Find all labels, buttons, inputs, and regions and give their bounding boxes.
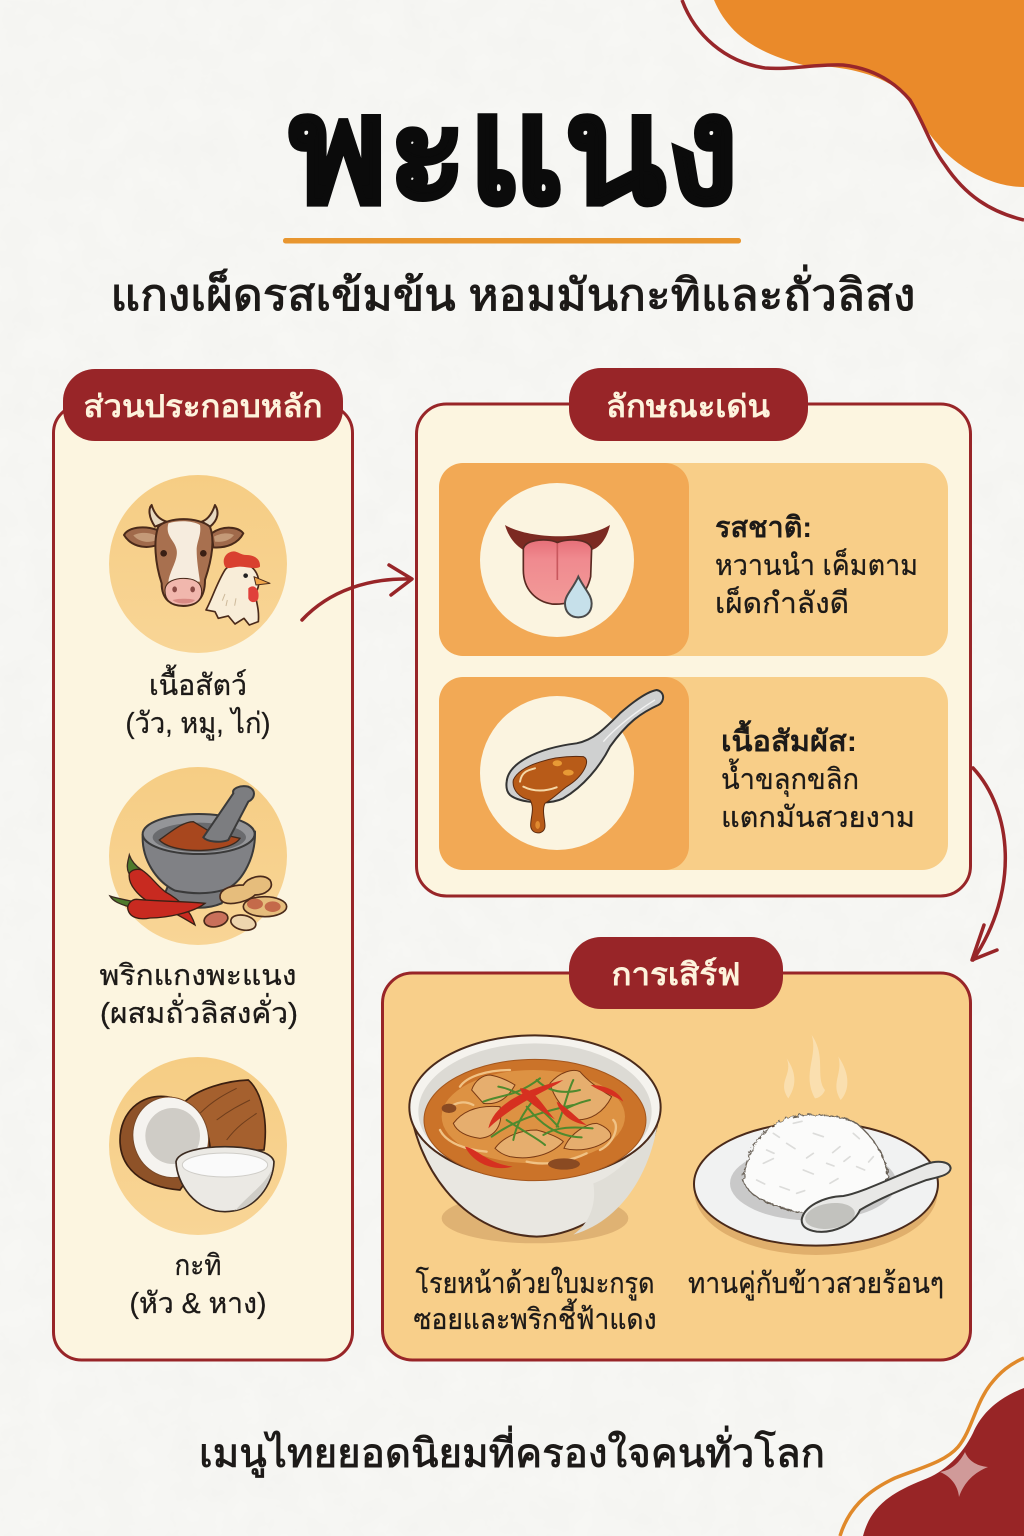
text: texture line two: แตกมันสวยงาม — [721, 802, 915, 834]
card: flavour — [439, 463, 948, 656]
icon: coconut and bowl of milk — [120, 1080, 274, 1212]
icon: sparkle — [940, 1452, 988, 1497]
arrow: ingredients to characteristics — [302, 565, 412, 620]
panel: serving — [382, 937, 970, 1360]
label: meat: เนื้อสัตว์ — [149, 664, 247, 702]
heading: serving — [569, 937, 783, 1009]
icon: mortar, chilies and peanuts — [110, 786, 287, 932]
card: texture — [439, 677, 948, 870]
label: meat types: (วัว, หมู, ไก่) — [126, 706, 270, 741]
label: curry paste: พริกแกงพะแนง — [100, 960, 296, 992]
heading: characteristics — [569, 368, 808, 441]
heading: serving: การเสิร์ฟ — [612, 957, 740, 992]
ingredient: meat — [109, 475, 287, 741]
text: flavour line one: หวานนำ เค็มตาม — [715, 547, 918, 582]
decoration: bottom right red blob — [863, 1388, 1024, 1536]
heading: main ingredients — [63, 369, 343, 441]
decoration: bottom right orange line — [840, 1358, 1024, 1536]
icon: spoon with sauce — [506, 690, 663, 833]
label: paste note: (ผสมถั่วลิสงคั่ว) — [100, 993, 298, 1030]
decoration: top right orange blob — [714, 0, 1024, 187]
illustration: plate of steamed rice — [694, 1035, 951, 1255]
caption: served with rice: ทานคู่กับข้าวสวยร้อนๆ — [688, 1268, 944, 1301]
title underline — [283, 238, 741, 244]
subtitle: แกงเผ็ดรสเข้มข้น หอมมันกะทิและถั่วลิสง — [110, 264, 916, 320]
icon: tongue with drop — [505, 525, 610, 617]
label: coconut milk: กะทิ — [174, 1250, 222, 1282]
title: พะแนง — [289, 65, 739, 235]
text: texture line one: น้ำขลุกขลิก — [721, 758, 859, 797]
footer tagline: เมนูไทยยอดนิยมที่ครองใจคนทั่วโลก — [199, 1426, 825, 1477]
ingredient: panang curry paste — [100, 767, 298, 1030]
text: texture heading: เนื้อสัมผัส: — [721, 719, 857, 758]
label: coconut milk types: (หัว & หาง) — [130, 1288, 266, 1320]
text: flavour line two: เผ็ดกำลังดี — [715, 585, 849, 620]
illustration: bowl of panang curry — [409, 1035, 661, 1243]
panel: main ingredients — [54, 369, 352, 1360]
text: flavour heading: รสชาติ: — [715, 512, 812, 544]
heading: characteristics: ลักษณะเด่น — [606, 389, 770, 424]
arrow: characteristics to serving — [972, 768, 1005, 960]
caption: garnish line one: โรยหน้าด้วยใบมะกรูด — [416, 1266, 654, 1301]
decoration: top right red line — [682, 0, 1024, 220]
heading: main ingredients: ส่วนประกอบหลัก — [84, 389, 322, 424]
caption: garnish line two: ซอยและพริกชี้ฟ้าแดง — [414, 1298, 656, 1336]
panel: characteristics — [416, 368, 970, 896]
icon: cow and chicken — [124, 505, 270, 625]
ingredient: coconut milk — [109, 1057, 287, 1320]
